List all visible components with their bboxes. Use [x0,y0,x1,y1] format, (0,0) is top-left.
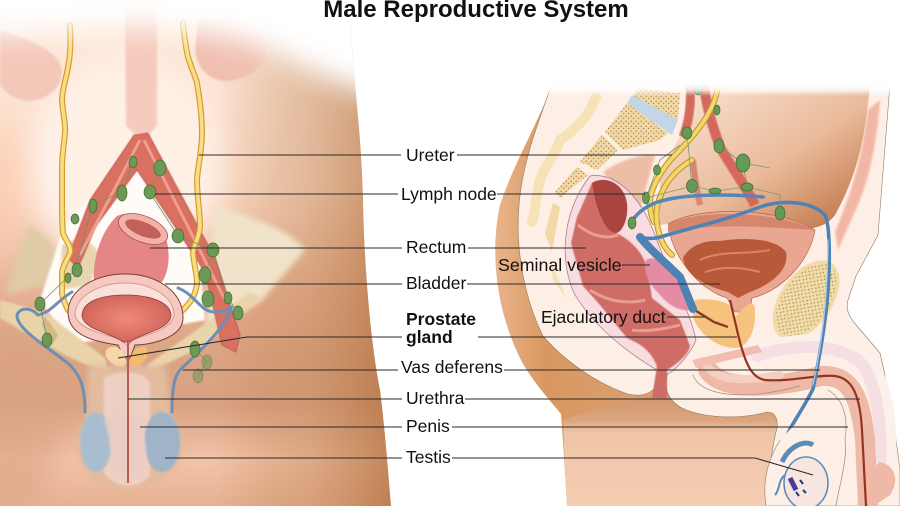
label: Testis: Testis [406,447,451,467]
lymph nodes [35,156,243,383]
urethra [730,300,866,506]
label: Prostate gland: Prostate [406,309,476,329]
penis [693,344,895,506]
pelvic basin and pubic bones [0,168,305,372]
label: Prostate gland: gland [406,327,453,347]
label: Ejaculatory duct: Ejaculatory duct [541,307,666,327]
label: Rectum: Rectum [406,237,466,257]
seminal vesicle [645,258,692,310]
label: Lymph node: Lymph node [401,184,497,204]
abdominal cavity [660,84,870,229]
ureters [62,23,202,310]
inner body cream area [518,84,900,506]
panel: front view of male pelvis [0,2,391,506]
label: Urethra: Urethra [406,388,465,408]
scrotum and testis [765,390,846,506]
top fade [0,0,357,110]
label: Penis: Penis [406,416,450,436]
label: Seminal vesicle: Seminal vesicle [498,255,622,275]
pubic bone [772,260,840,338]
label: Testis [165,447,813,475]
label: Ureter: Ureter [406,145,455,165]
bladder [68,274,183,358]
ureter [650,87,718,255]
vas deferens [17,288,232,412]
vas deferens [632,193,832,434]
scrotum, penis and testes [77,340,183,489]
thigh [563,392,777,506]
sacrum and spine [532,88,680,300]
rectum [94,213,169,282]
prostate gland [106,347,148,367]
icon: kidneys [0,18,267,101]
arteries [683,84,755,205]
buttock and back skin [495,98,668,506]
rectum [565,176,696,398]
label: Prostate gland [118,309,737,358]
peritoneum above rectum [603,155,655,210]
aorta and iliac arteries [68,0,240,352]
prostate gland [693,299,755,348]
ejaculatory duct [693,309,728,327]
label: Bladder: Bladder [406,273,466,293]
lymph nodes [628,85,785,229]
label: Vas deferens: Vas deferens [401,357,503,377]
abdominal wall muscle [835,100,880,250]
urogenital diaphragm [692,345,762,368]
panel: side view of male pelvis [480,84,900,506]
bladder [668,211,815,312]
top fade of side view [548,84,890,96]
